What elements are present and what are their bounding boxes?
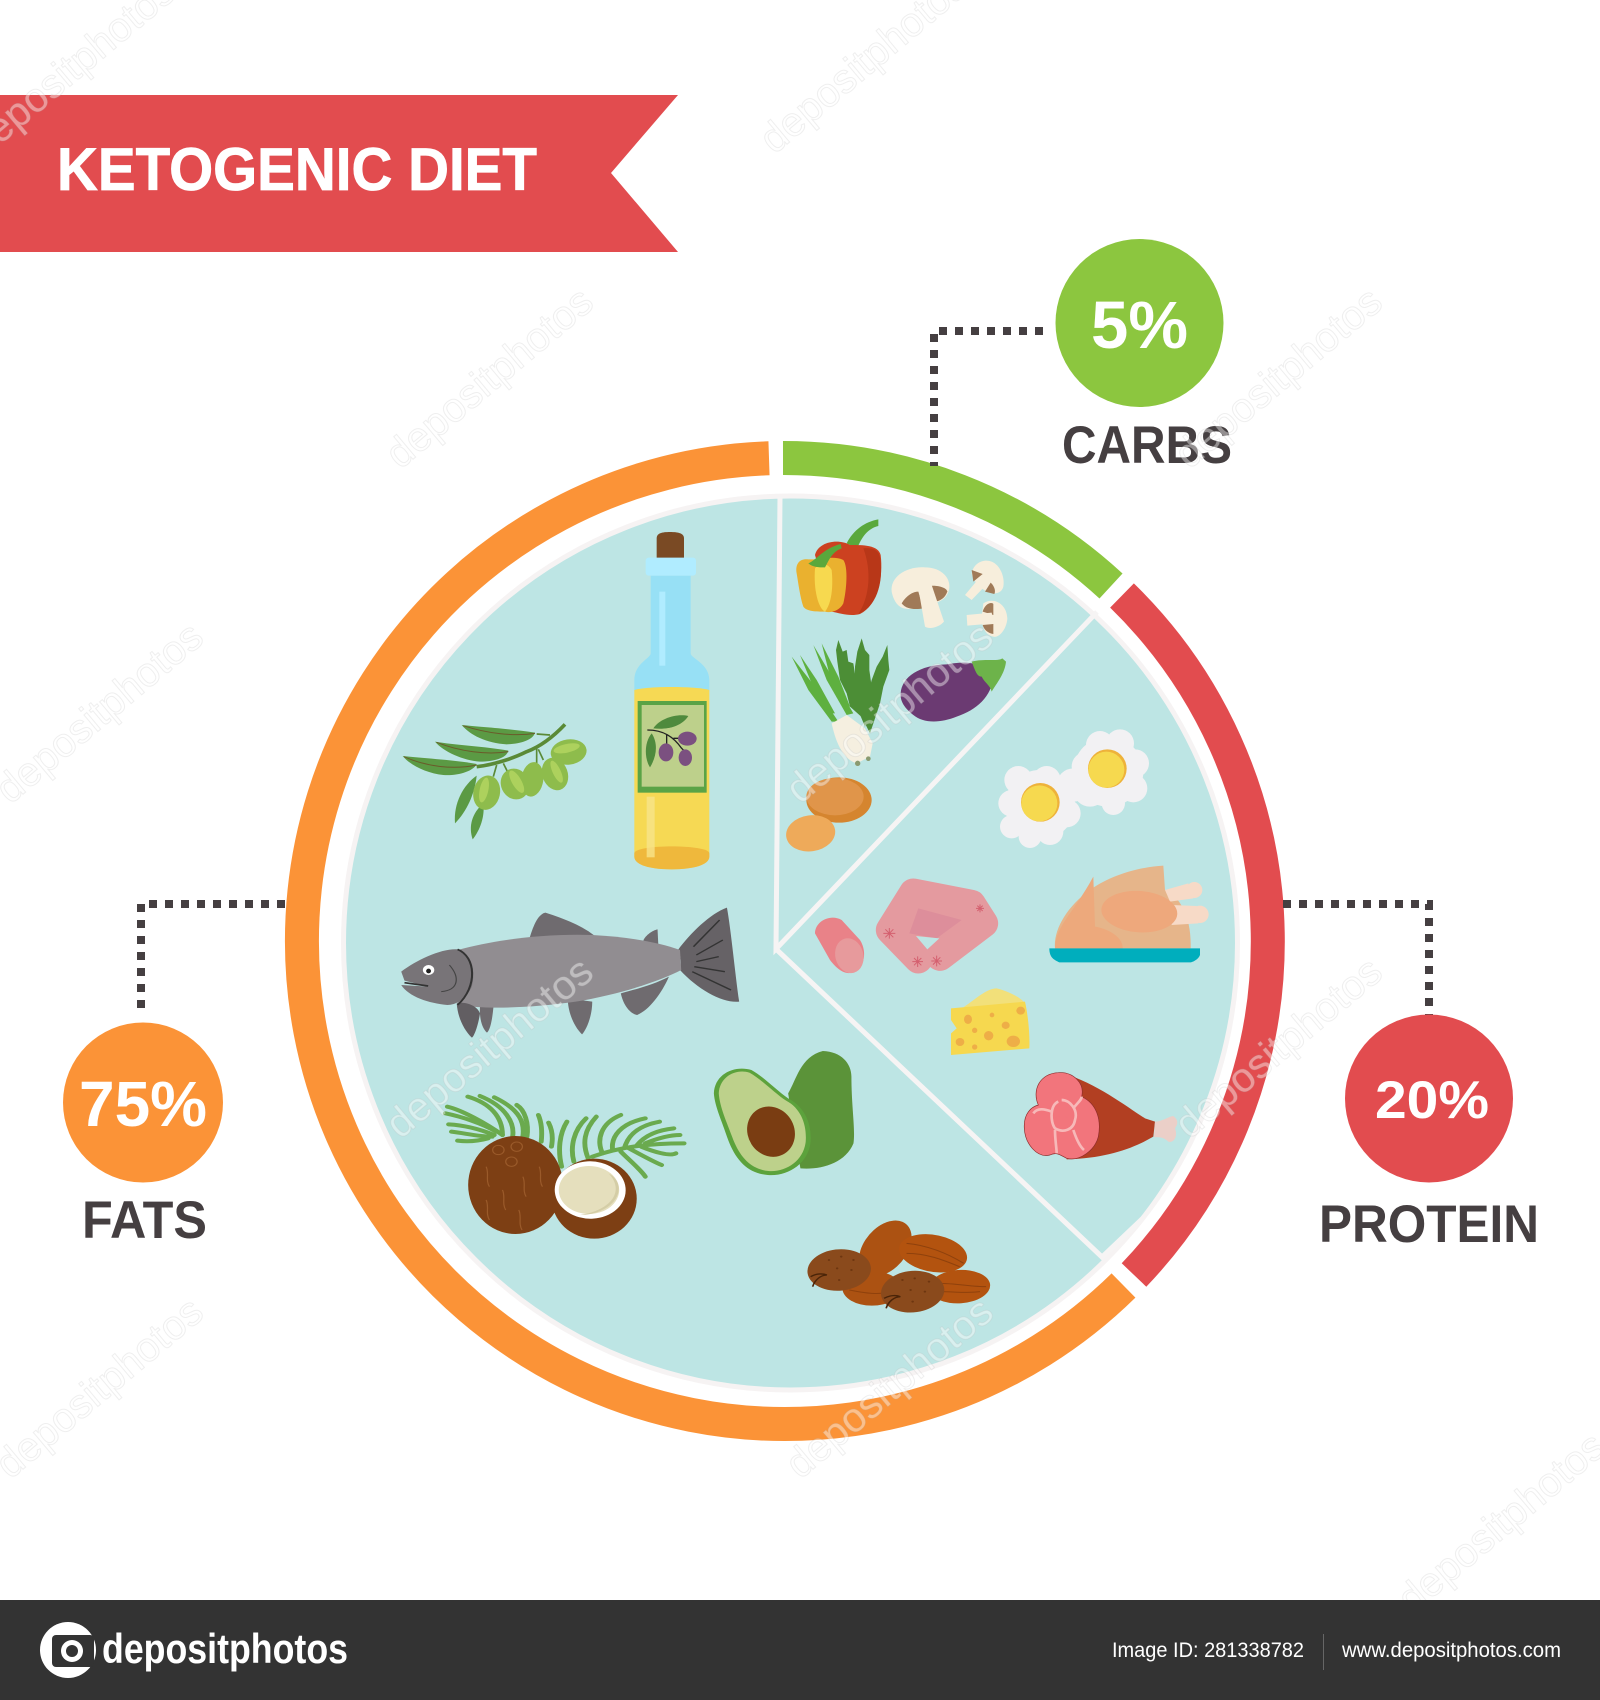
badge: 5% [1056,239,1224,407]
icon: cheese [951,988,1029,1055]
watermark text: depositphotos [376,278,602,477]
icon: almonds [804,1213,992,1317]
connector: protein [1283,904,1429,1015]
icon: mushrooms [892,561,1007,637]
icon: roast chicken [1049,866,1209,962]
value: 75%: 75% [79,1068,207,1140]
outer ring: macro proportions [302,458,1268,1424]
label: protein: PROTEIN [1319,1195,1539,1254]
callout: fats [63,904,285,1250]
watermark text: depositphotos [376,948,602,1147]
icon: coconut with palm leaf [445,1096,684,1239]
icon: potatoes [784,777,872,855]
badge: 75% [63,1022,223,1182]
carbs foods [784,519,1007,855]
watermark text: depositphotos [1165,948,1391,1147]
icon: salmon [401,908,739,1038]
ring segment: fats [302,458,1123,1424]
ring segment: carbs [783,458,1111,586]
callout: carbs [934,239,1232,475]
badge: 20% [1345,1014,1513,1182]
logo text: depositphotos [102,1625,348,1672]
label: fats: FATS [82,1191,207,1250]
icon: herbs and scallions [792,638,889,766]
icon: depositphotos logo [40,1622,96,1678]
website: www.depositphotos.com [1341,1639,1561,1662]
image id: Image ID: 281338782 [1112,1639,1304,1662]
icon: fried eggs [998,729,1149,848]
fat foods: oil and olives [403,532,709,869]
fat foods: fish, coconut, avocado, almonds [401,908,992,1317]
title text: KETOGENIC DIET [57,136,537,203]
protein foods [815,729,1209,1159]
watermark text: depositphotos [776,613,1002,812]
callout: protein [1283,904,1539,1254]
icon: eggplant [901,658,1006,721]
icon: bell peppers [796,519,881,615]
label: carbs: CARBS [1062,416,1232,475]
value: 20%: 20% [1375,1071,1489,1130]
footer bar [0,1600,1600,1700]
icon: olive oil bottle [634,532,709,869]
title banner [0,95,678,252]
icon: sausage [815,893,984,976]
watermark text: depositphotos [1165,278,1391,477]
ring segment: protein [1122,596,1268,1275]
value: 5%: 5% [1091,288,1188,363]
connector: carbs [934,331,1043,466]
icon: ham [1024,1073,1177,1159]
plate background [344,496,1238,1390]
connector: fats [141,904,285,1014]
icon: olive branch [403,724,588,839]
icon: avocado [714,1051,854,1175]
watermark text: depositphotos [776,1288,1002,1487]
slice dividers [776,497,1142,1257]
